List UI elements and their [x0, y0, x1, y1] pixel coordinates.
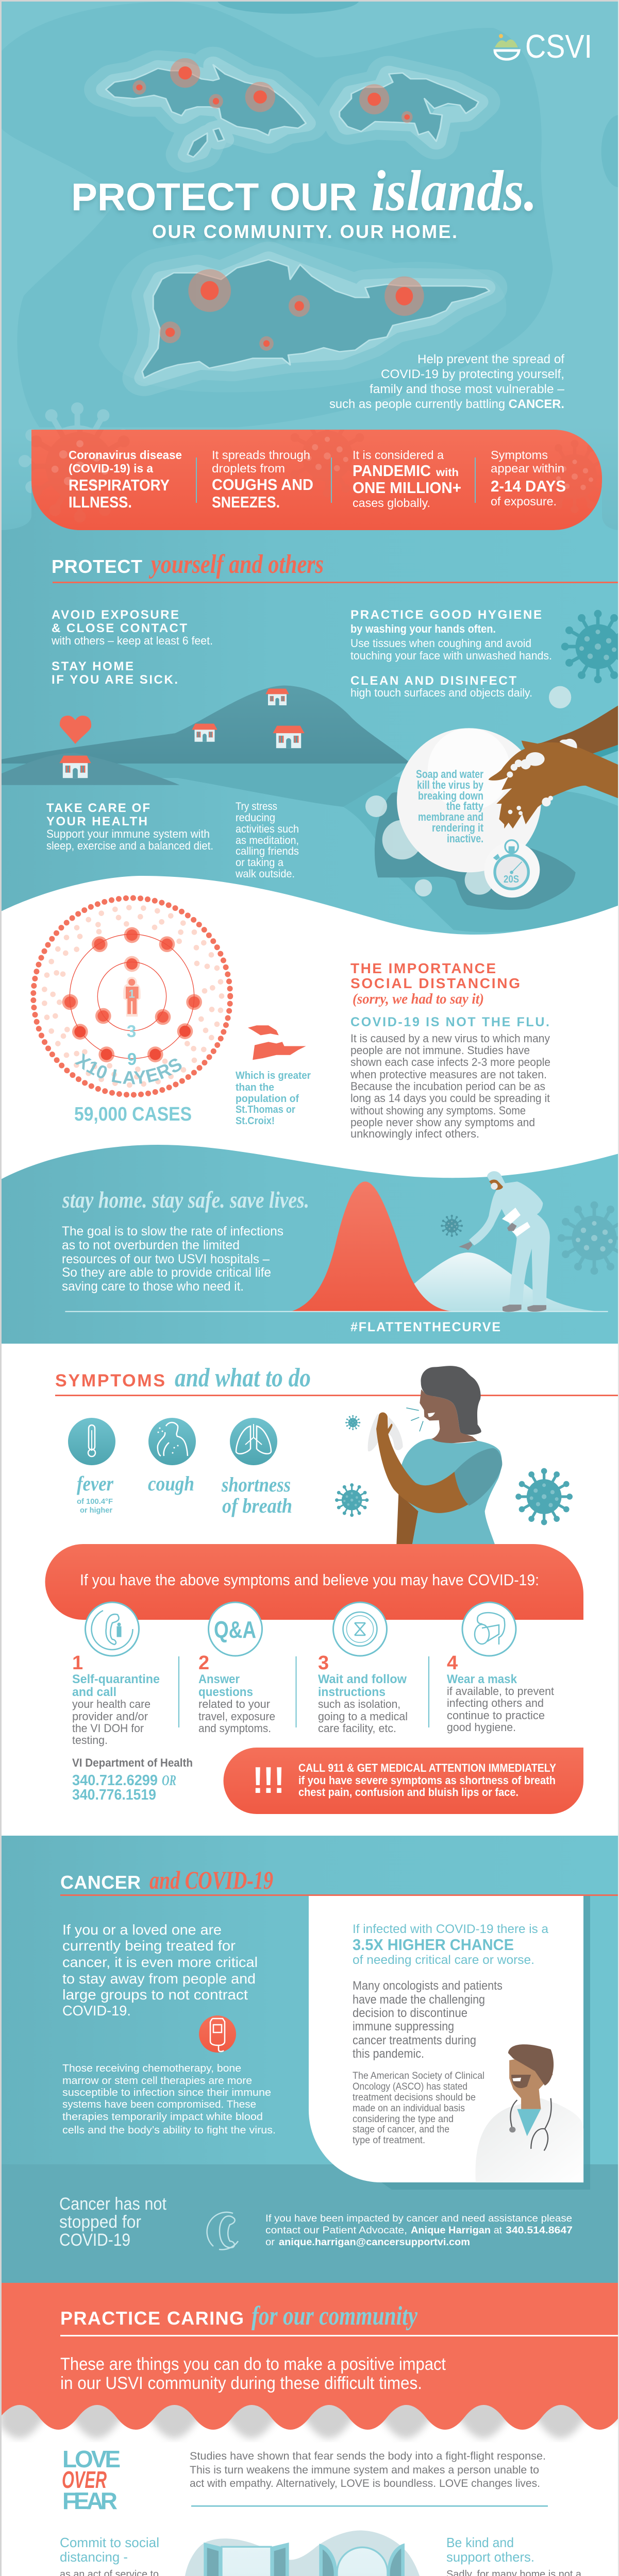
text: not the flu body: without showing any symptoms. Some [350, 1104, 526, 1117]
text: department of health phone numbers: 340.712.6299 [72, 1772, 158, 1789]
text: positive impact: These are things you can do to make a positive impact [60, 2354, 446, 2374]
text: fear and empathy: act with empathy. Alternatively, LOVE is boundless. LOVE changes lives. [190, 2478, 540, 2489]
text: not the flu body: long as 14 days you could be spreading it [350, 1092, 550, 1105]
text: ASCO: treatment decisions should be [353, 2092, 476, 2103]
text: population comparison: population of [236, 1093, 299, 1105]
text: population comparison: St.Thomas or [236, 1104, 295, 1115]
heading: practice caring: for our community [252, 2301, 418, 2331]
symptom: fever: of 100.4°F [77, 1497, 113, 1506]
chart: 10 layers of infection spread [30, 895, 233, 1125]
text: ASCO: considering the type and [353, 2114, 454, 2125]
text: flatten goal: resources of our two USVI hospitals – [62, 1252, 270, 1266]
step 3 text: Wait and follow [318, 1672, 407, 1686]
text: chemotherapy: marrow or stem cell therapies are more [62, 2075, 252, 2087]
text: not the flu body [350, 1032, 550, 1140]
title [71, 159, 537, 242]
fact: droplets: COUGHS AND [212, 476, 313, 494]
text: not the flu body: when protective measures are not taken. [350, 1068, 547, 1081]
step 4 text [447, 1652, 554, 1734]
icon: phone [207, 2212, 238, 2249]
text: patient advocate: 340.514.8647 [506, 2225, 573, 2236]
heading: cancer and covid [60, 1866, 619, 1896]
text: population comparison: Which is greater [236, 1070, 311, 1081]
panel: 3.5x higher chance card [309, 1896, 590, 2190]
logo: CSVI top: CSVI [525, 28, 592, 65]
step 1 text: testing. [72, 1734, 108, 1747]
step 2 text: travel, exposure [198, 1710, 275, 1723]
text: treated for cancer: to stay away from people and [62, 1971, 256, 1987]
symptom: fever: or higher [80, 1506, 112, 1515]
heading: symptoms and what to do: SYMPTOMS [55, 1371, 165, 1391]
step 2 text: related to your [198, 1698, 270, 1710]
icon: virus right [561, 610, 619, 683]
text: be kind [446, 2535, 583, 2576]
text: patient advocate: Anique Harrigan [411, 2225, 491, 2236]
fact: respiratory illness: ILLNESS. [69, 493, 132, 511]
panel: 3.5x higher chance card: of needing critical care or worse. [353, 1953, 534, 1967]
icon: step 1 phone and person [86, 1602, 139, 1656]
text: patient advocate [265, 2213, 573, 2248]
icon: central person: 1 [129, 988, 135, 1001]
text: cancer has not stopped: COVID-19 [59, 2230, 130, 2250]
intro text: Help prevent the spread of [417, 352, 564, 366]
text: treated for cancer: cancer, it is even more critical [62, 1954, 258, 1970]
panel: protect section background [0, 482, 619, 935]
text: take care of your health: TAKE CARE OF [46, 801, 150, 815]
heading: practice caring: PRACTICE CARING [60, 2308, 244, 2329]
title: OUR COMMUNITY. OUR HOME. [152, 221, 457, 242]
panel: practice caring red section [0, 2283, 619, 2430]
illustration: island hills and houses [0, 685, 411, 807]
icon: heart [60, 716, 91, 744]
text: soap callout: kill the virus by [417, 778, 484, 791]
fact: symptoms timing: 2-14 DAYS [491, 477, 566, 495]
step 2 text: Answer [198, 1672, 240, 1686]
text: treated for cancer [62, 1922, 258, 2019]
text: avoid exposure: with others – keep at least 6 feet. [51, 634, 213, 647]
step 3 text [318, 1652, 408, 1735]
step 4 text: 4 [447, 1652, 458, 1674]
panel: 3.5x higher chance card: 3.5X HIGHER CHANCE [353, 1936, 514, 1954]
heading: cancer and covid: and COVID-19 [149, 1866, 273, 1894]
text: avoid exposure [51, 608, 213, 687]
text: department of health phone numbers: VI Department of Health [72, 1756, 193, 1769]
text: fear and empathy: Studies have shown that fear sends the body into a fight-flight response. [190, 2450, 546, 2462]
text: oncologists: have made the challenging [353, 1993, 485, 2007]
text: population comparison: than the [236, 1082, 274, 1093]
heading: love over fear: FEAR [62, 2487, 118, 2514]
text: chemotherapy: cells and the body’s ability to fight the virus. [62, 2125, 276, 2136]
text: positive impact: in our USVI community during these difficult times. [60, 2374, 422, 2393]
text: treated for cancer: COVID-19. [62, 2003, 131, 2019]
fact: respiratory illness: (COVID-19) is a [69, 462, 153, 475]
text: not the flu body: Because the incubation period can be as [350, 1080, 545, 1093]
step 1 text: 1 [72, 1652, 83, 1674]
text: ASCO: The American Society of Clinical [353, 2071, 484, 2081]
heading: symptoms and what to do [55, 1363, 619, 1396]
symptom: cough [148, 1418, 196, 1495]
callout: call 911: if you have severe symptoms as shortness of breath [298, 1774, 556, 1787]
text: ASCO: type of treatment. [353, 2135, 425, 2146]
step 4 text: continue to practice [447, 1709, 545, 1722]
panel: flatten the curve: #FLATTENTHECURVE [350, 1320, 500, 1334]
text: flatten goal: The goal is to slow the rate of infections [62, 1224, 283, 1239]
map: US Virgin Islands with hot spots [106, 58, 490, 378]
step 3 text: going to a medical [318, 1710, 408, 1723]
text: stress reducing [235, 801, 299, 880]
fact: droplets: It spreads through [212, 448, 310, 462]
fact: symptoms timing: Symptoms [491, 448, 548, 462]
text: department of health phone numbers: 340.776.1519 [72, 1787, 156, 1803]
title: PROTECT OUR [71, 175, 357, 218]
fact: pandemic: ONE MILLION+ [353, 479, 461, 497]
text: hygiene: CLEAN AND DISINFECT [350, 674, 516, 688]
text: avoid exposure: STAY HOME [52, 659, 133, 673]
symptom: cough: cough [148, 1472, 194, 1495]
text: stress reducing: as meditation, [236, 835, 299, 846]
text: flatten goal: as to not overburden the limited [62, 1238, 240, 1252]
text: soap callout [416, 768, 484, 845]
heading: protect yourself and others [52, 550, 619, 583]
text: hygiene [350, 608, 552, 699]
callout: call 911 [224, 1748, 583, 1814]
illustration: soap hands and timer [343, 686, 619, 932]
icon: step 3 hourglass clock [333, 1602, 387, 1656]
chart: 10 layers of infection spread: 3 [127, 1022, 136, 1041]
text: patient advocate: or [265, 2237, 275, 2248]
heading: love over fear: OVER [62, 2466, 107, 2493]
panel: 3.5x higher chance card: If infected with COVID-19 there is a [353, 1922, 549, 1936]
callout: call 911: !!! [253, 1760, 285, 1801]
text: chemotherapy: susceptible to infection since their immune [62, 2087, 271, 2098]
step 1 text: and call [72, 1685, 116, 1699]
fact: pandemic: PANDEMIC [353, 462, 431, 480]
text: positive impact [60, 2354, 446, 2393]
text: department of health phone numbers: OR [162, 1772, 176, 1789]
heading: love over fear [62, 2446, 121, 2514]
symptom: shortness of breath [221, 1418, 292, 1517]
label: x10 layers on arc: X10 LAYERS [75, 1053, 181, 1084]
shadow under scalloped edge [0, 2400, 619, 2438]
panel: cancer and covid section [0, 1836, 619, 2283]
chart: 10 layers of infection spread: 59,000 CASES [74, 1104, 192, 1125]
icon: central person [123, 977, 141, 1016]
hero panel: ocean map [0, 0, 619, 531]
icon: step 4 face mask [462, 1602, 516, 1656]
text: oncologists: Many oncologists and patients [353, 1979, 503, 1993]
text: commit to social distancing: Commit to social [60, 2535, 159, 2550]
step 2 text: questions [198, 1685, 253, 1699]
text: cancer has not stopped: Cancer has not [59, 2194, 166, 2214]
text: patient advocate: If you have been impacted by cancer and need assistance please [265, 2213, 572, 2224]
text: stress reducing: reducing [236, 812, 275, 824]
text: avoid exposure: & CLOSE CONTACT [52, 621, 187, 635]
step 1 text: Self-quarantine [72, 1672, 160, 1686]
text: soap callout: the fatty [446, 800, 484, 812]
intro text [329, 352, 565, 411]
fact: droplets: SNEEZES. [212, 493, 280, 511]
step 1 text: the VI DOH for [72, 1722, 144, 1735]
text: hygiene: touching your face with unwashed hands. [350, 649, 552, 662]
text: avoid exposure: IF YOU ARE SICK. [52, 673, 178, 687]
heading: importance of social distancing: COVID-19 IS NOT THE FLU. [350, 1015, 549, 1029]
heading: importance of social distancing [350, 960, 549, 1029]
chart: flatten the curve [65, 1181, 608, 1312]
text: stress reducing: Try stress [236, 801, 277, 812]
callout: call 911: CALL 911 & GET MEDICAL ATTENTION IMMEDIATELY [298, 1761, 556, 1774]
text: treated for cancer: large groups to not contract [62, 1987, 248, 2003]
fact: pandemic [353, 448, 461, 510]
heading: importance of social distancing: THE IMPORTANCE [350, 960, 496, 976]
text: department of health phone numbers [72, 1756, 193, 1803]
text: soap callout: Soap and water [416, 768, 483, 781]
callout: call 911: chest pain, confusion and bluish lips or face. [298, 1786, 518, 1799]
text: patient advocate: contact our Patient Advocate, [265, 2225, 407, 2236]
icon: chemo IV bag [199, 2015, 236, 2053]
text: hygiene: high touch surfaces and objects daily. [350, 686, 532, 699]
panel: what to do red banner: If you have the above symptoms and believe you may have COVID-19: [80, 1571, 539, 1589]
heading: practice caring [60, 2301, 619, 2336]
text: hygiene: Use tissues when coughing and avoid [350, 637, 531, 650]
text: be kind: support others. [446, 2549, 534, 2565]
text: chemotherapy: therapies temporarily impact white blood [62, 2111, 263, 2123]
text: hygiene: PRACTICE GOOD HYGIENE [350, 608, 542, 622]
fact: symptoms timing: of exposure. [491, 495, 557, 508]
step 3 text: 3 [318, 1652, 329, 1674]
text: population comparison: St.Croix! [236, 1115, 275, 1127]
text: oncologists: decision to discontinue [353, 2006, 467, 2020]
intro text: COVID-19 by protecting yourself, [381, 367, 564, 381]
text: hygiene: by washing your hands often. [350, 622, 496, 635]
fact: droplets [212, 448, 313, 511]
text: not the flu body: people are not immune. Studies have [350, 1044, 530, 1057]
text: oncologists: cancer treatments during [353, 2033, 476, 2047]
text: fear and empathy [190, 2450, 546, 2489]
text: oncologists [353, 1979, 503, 2061]
text: take care of your health [46, 801, 213, 852]
text: soap callout: inactive. [447, 832, 483, 845]
text: treated for cancer: currently being treated for [62, 1938, 236, 1954]
fact: symptoms timing [491, 448, 566, 508]
icon: step 2 Q and A [208, 1602, 262, 1656]
illustration: soap hands and timer: 20S [504, 874, 519, 885]
text: ASCO: made on an individual basis [353, 2103, 465, 2114]
heading: protect yourself and others: PROTECT [52, 556, 142, 577]
map: red USVI silhouette [248, 1025, 306, 1060]
text: not the flu body: It is caused by a new virus to which many [350, 1032, 550, 1045]
text: take care of your health: Support your immune system with [46, 827, 210, 840]
step 2 text: and symptoms. [198, 1722, 271, 1735]
step 4 text: good hygiene. [447, 1721, 516, 1734]
window openings [222, 2547, 388, 2576]
step 2 text: 2 [198, 1652, 209, 1674]
step 1 text: your health care [72, 1698, 150, 1710]
text: treated for cancer: If you or a loved one are [62, 1922, 222, 1938]
text: cancer has not stopped [59, 2194, 166, 2250]
symptom: shortness of breath: of breath [222, 1494, 292, 1517]
symptom: fever [68, 1418, 115, 1515]
text: patient advocate: anique.harrigan@cancersupportvi.com [279, 2237, 470, 2248]
heading: love over fear: LOVE [62, 2446, 121, 2472]
fact: respiratory illness [69, 448, 182, 511]
step 3 text: instructions [318, 1685, 386, 1699]
chart: 10 layers of infection spread: 9 [127, 1049, 137, 1069]
step 4 text: infecting others and [447, 1697, 544, 1709]
illustration: doctor [475, 2044, 583, 2182]
text: ASCO: Oncology (ASCO) has stated [353, 2081, 467, 2092]
shutters [204, 2543, 405, 2576]
text: soap callout: breaking down [418, 789, 483, 802]
text: commit to social distancing [60, 2535, 162, 2576]
illustration: woman coughing with viruses [335, 1366, 573, 1544]
text: avoid exposure: AVOID EXPOSURE [52, 608, 179, 622]
heading: importance of social distancing: (sorry, we had to say it) [353, 991, 484, 1007]
text: stress reducing: activities such [236, 823, 299, 835]
heading: cancer and covid: CANCER [60, 1872, 141, 1893]
fact: respiratory illness: RESPIRATORY [69, 476, 170, 494]
panel: flatten the curve [0, 1145, 619, 1344]
step 2 text [198, 1652, 275, 1735]
text: stress reducing: walk outside. [235, 868, 295, 880]
text: be kind: Be kind and [446, 2535, 514, 2550]
text: chemotherapy: Those receiving chemotherapy, bone [62, 2063, 241, 2074]
fact: symptoms timing: appear within [491, 462, 564, 475]
symptom: fever: fever [77, 1472, 113, 1495]
text: oncologists: immune suppressing [353, 2020, 454, 2033]
text: flatten goal: saving care to those who need it. [62, 1279, 244, 1294]
text: commit to social distancing: distancing - [60, 2549, 128, 2565]
logo: CSVI top [495, 28, 592, 65]
text: flatten goal: So they are able to provide critical life [62, 1265, 271, 1280]
step 4 text: if available, to prevent [447, 1685, 554, 1698]
text: soap callout: rendering it [432, 821, 484, 834]
text: chemotherapy: systems have been compromised. These [62, 2099, 256, 2110]
text: flatten goal [62, 1224, 283, 1294]
title: islands. [371, 159, 537, 223]
step 1 text [72, 1652, 160, 1747]
text: not the flu body: unknowingly infect others. [350, 1127, 479, 1140]
text: stay home: stay home. stay safe. save lives. [62, 1187, 309, 1213]
step 4 text: Wear a mask [447, 1672, 517, 1686]
fact: pandemic: It is considered a [353, 448, 444, 462]
text: take care of your health: YOUR HEALTH [46, 815, 147, 828]
text: cancer has not stopped: stopped for [59, 2212, 141, 2232]
step 3 text: such as isolation, [318, 1698, 400, 1710]
icon: faint virus behind banner [19, 402, 136, 520]
icon: step 2 Q and A: Q&A [214, 1616, 256, 1643]
illustration: health worker in protective suit [441, 1171, 550, 1312]
text: oncologists: this pandemic. [353, 2047, 424, 2061]
panel: what to do red banner [45, 1544, 583, 1620]
text: ASCO [353, 2071, 484, 2146]
text: patient advocate: at [494, 2225, 503, 2236]
step 3 text: care facility, etc. [318, 1722, 396, 1735]
fact: respiratory illness: Coronavirus disease [69, 448, 182, 462]
heading: protect yourself and others: yourself and others [148, 550, 324, 579]
illustration: four windows community [184, 2531, 427, 2576]
text: take care of your health: sleep, exercise and a balanced diet. [46, 839, 213, 852]
text: soap callout: membrane and [418, 810, 483, 823]
text: chemotherapy [62, 2063, 276, 2136]
intro text: such as people currently battling CANCER. [329, 397, 564, 411]
step 1 text: provider and/or [72, 1710, 148, 1723]
intro text: family and those most vulnerable – [370, 382, 565, 396]
text: population comparison [236, 1070, 311, 1127]
text: not the flu body: people never show any symptoms and [350, 1116, 535, 1129]
fact: pandemic: with [436, 467, 459, 479]
panel: red fact banner [31, 430, 602, 530]
text: fear and empathy: This is turn weakens the immune system and makes a person unable to [190, 2464, 539, 2476]
text: not the flu body: shown each case infects 2-3 more people [350, 1056, 550, 1069]
text: ASCO: stage of cancer, and the [353, 2124, 449, 2135]
text: stress reducing: calling friends [236, 845, 299, 857]
text: stress reducing: or taking a [236, 857, 283, 869]
heading: symptoms and what to do: and what to do [175, 1363, 311, 1393]
fact: droplets: droplets from [212, 462, 285, 475]
heading: importance of social distancing: SOCIAL DISTANCING [350, 975, 520, 991]
symptom: shortness of breath: shortness [221, 1473, 291, 1496]
fact: pandemic: cases globally. [353, 496, 430, 510]
